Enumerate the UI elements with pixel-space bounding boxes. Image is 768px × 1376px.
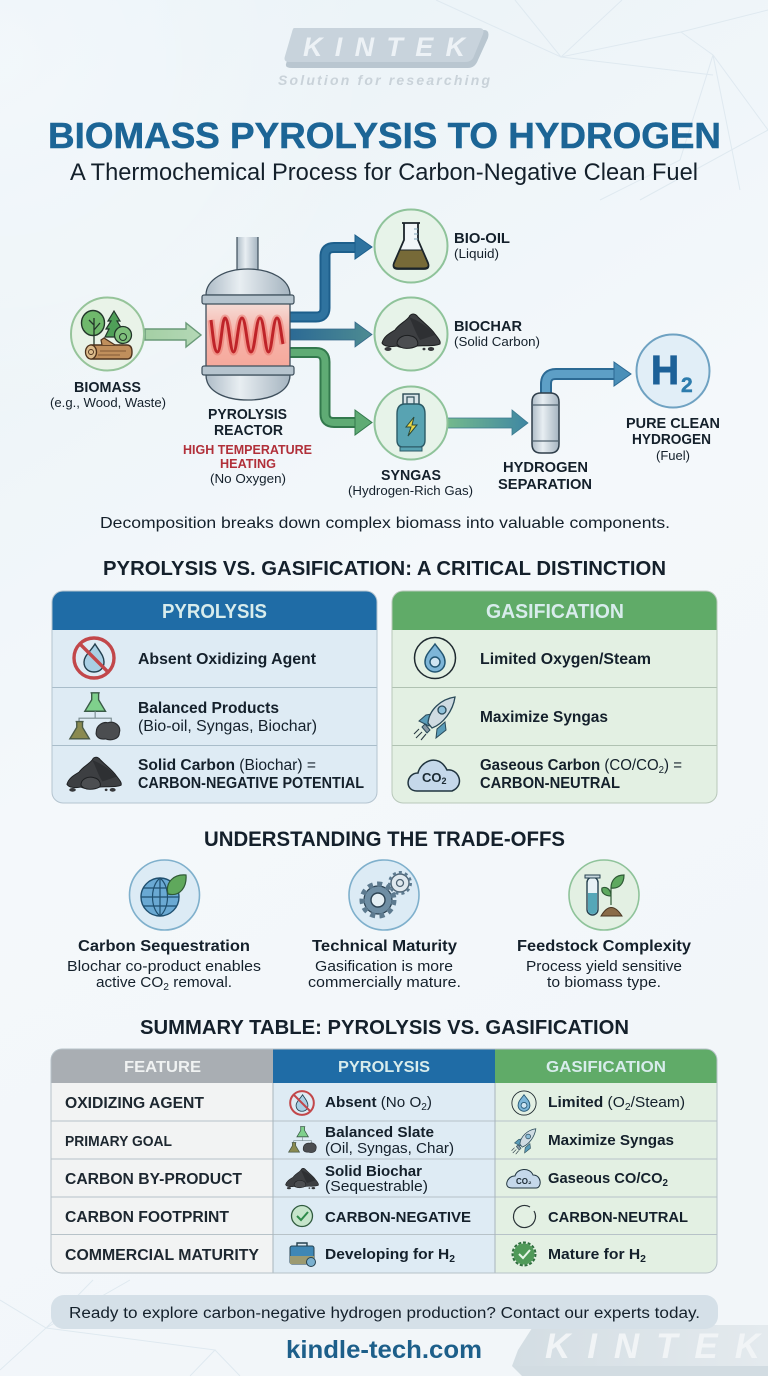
row: primary goal: PRIMARY GOAL <box>65 1133 172 1150</box>
row: primary goal: (Oil, Syngas, Char) <box>325 1140 454 1157</box>
table header: GASIFICATION <box>546 1059 666 1076</box>
icon: limited oxygen <box>414 638 456 678</box>
label: reactor: PYROLYSIS <box>208 406 287 423</box>
text: feedstock complexity <box>517 938 691 991</box>
label: bio-oil <box>454 230 510 261</box>
trade-off: technical maturity <box>308 860 461 991</box>
heading: summary table: SUMMARY TABLE: PYROLYSIS VS. GASIFICATION <box>140 1017 629 1039</box>
icon: no oxidizer <box>74 638 114 678</box>
icon: bio-oil flask <box>374 210 448 282</box>
reactor vessel <box>202 237 294 400</box>
heading: critical distinction: PYROLYSIS VS. GASIFICATION: A CRITICAL DISTINCTION <box>103 558 666 580</box>
row: carbon footprint: CARBON-NEUTRAL <box>548 1209 688 1226</box>
label: biochar: (Solid Carbon) <box>454 334 540 349</box>
label: hydrogen separation: HYDROGEN <box>503 459 588 476</box>
label: biomass <box>50 379 166 410</box>
row: commercial maturity: Developing for H <box>325 1246 445 1263</box>
label: reactor: (No Oxygen) <box>210 471 286 486</box>
row: oxidizing agent: ) <box>427 1094 432 1111</box>
table header <box>124 1059 666 1076</box>
row: absent oxidizing agent: Absent Oxidizing Agent <box>138 651 316 668</box>
summary table <box>51 1049 717 1273</box>
row: solid carbon: CARBON-NEGATIVE POTENTIAL <box>138 775 364 792</box>
row: carbon by-product: CO₂ <box>516 1177 532 1186</box>
row: solid carbon <box>138 757 364 792</box>
row: carbon by-product: 2 <box>663 1178 668 1189</box>
label: syngas <box>348 467 473 498</box>
icon: product tree <box>70 693 120 740</box>
logo: KINTEK header <box>278 28 490 88</box>
table header: PYROLYSIS <box>338 1059 430 1076</box>
row: gaseous carbon: CARBON-NEUTRAL <box>480 775 620 792</box>
text: carbon sequestration: active CO <box>96 974 162 991</box>
icon: globe and leaf <box>130 860 200 930</box>
table header: FEATURE <box>124 1059 201 1076</box>
row: commercial maturity: 2 <box>449 1254 455 1265</box>
row: primary goal: Maximize Syngas <box>548 1132 674 1149</box>
text: technical maturity: Technical Maturity <box>312 938 457 955</box>
heading: trade-offs: UNDERSTANDING THE TRADE-OFFS <box>204 828 565 851</box>
row: commercial maturity: Mature for H <box>548 1246 636 1263</box>
text: carbon sequestration: removal. <box>169 974 232 991</box>
row: carbon footprint: CARBON FOOTPRINT <box>65 1209 230 1226</box>
row: solid carbon: Solid Carbon (Biochar) = <box>138 757 316 774</box>
label: hydrogen separation <box>498 459 592 493</box>
arrow: separation to hydrogen <box>546 362 631 394</box>
label: pure clean hydrogen <box>626 415 720 463</box>
icon: H2: H <box>651 347 679 393</box>
label: reactor: REACTOR <box>214 422 283 439</box>
watermark logo: KINTEK <box>545 1327 763 1366</box>
icon: syngas cylinder <box>374 386 448 460</box>
arrow: biomass to reactor <box>145 323 201 347</box>
row: commercial maturity: 2 <box>640 1254 646 1265</box>
row: carbon by-product: Solid Biochar <box>325 1163 422 1180</box>
icon: gears <box>349 860 419 930</box>
text: technical maturity <box>308 938 461 991</box>
row: commercial maturity: COMMERCIAL MATURITY <box>65 1247 260 1264</box>
watermark logo <box>512 1325 768 1376</box>
trade-off: carbon sequestration <box>67 860 261 993</box>
icon: H2: 2 <box>681 374 693 397</box>
row: gaseous carbon <box>480 757 682 792</box>
text: carbon sequestration: 2 <box>163 982 169 993</box>
header: pyrolysis: PYROLYSIS <box>162 601 267 623</box>
icon: test tube and sprout <box>569 860 639 930</box>
call to action <box>51 1295 718 1329</box>
arrow: syngas to separation <box>447 410 528 435</box>
icon: hydrogen separation unit <box>532 393 559 453</box>
title: BIOMASS PYROLYSIS TO HYDROGEN <box>48 115 721 156</box>
icon: co2 cloud <box>408 760 459 791</box>
arrow: reactor to bio-oil <box>290 235 372 317</box>
text: feedstock complexity: Process yield sensitive <box>526 958 682 975</box>
logo: KINTEK header: Solution for researching <box>278 72 490 88</box>
label: pure clean hydrogen: (Fuel) <box>656 448 690 463</box>
row: carbon by-product: Gaseous CO/CO <box>548 1170 665 1187</box>
icon: biochar <box>67 757 121 792</box>
row: carbon footprint <box>65 1206 688 1228</box>
row: oxidizing agent: Limited (O <box>548 1094 624 1111</box>
label: syngas: (Hydrogen-Rich Gas) <box>348 483 473 498</box>
label: pure clean hydrogen: PURE CLEAN <box>626 415 720 432</box>
text: carbon sequestration: Carbon Sequestration <box>78 938 250 955</box>
icon: rocket <box>414 697 455 740</box>
process flow diagram <box>50 210 720 498</box>
label: reactor: HIGH TEMPERATURE <box>183 442 312 457</box>
row: maximize syngas: Maximize Syngas <box>480 709 608 726</box>
text: technical maturity: commercially mature. <box>308 974 461 991</box>
row: oxidizing agent: 2 <box>421 1102 427 1113</box>
text: carbon sequestration <box>67 938 261 993</box>
label: biochar: BIOCHAR <box>454 318 522 335</box>
icon: biochar pile <box>374 298 448 370</box>
row: primary goal: Balanced Slate <box>325 1124 434 1141</box>
logo: KINTEK header: KINTEK <box>303 32 468 62</box>
row: balanced products: Balanced Products <box>138 700 279 717</box>
label: reactor: HEATING <box>220 456 276 471</box>
row: oxidizing agent: /Steam) <box>631 1094 685 1111</box>
label: syngas: SYNGAS <box>381 467 441 484</box>
row: balanced products <box>138 700 317 735</box>
row: gaseous carbon: Gaseous Carbon (CO/CO <box>480 757 660 774</box>
icon: co2 cloud: CO <box>422 770 442 785</box>
row: carbon by-product: CARBON BY-PRODUCT <box>65 1171 243 1188</box>
icon: biomass <box>71 298 144 370</box>
row: oxidizing agent <box>65 1091 685 1115</box>
subtitle: A Thermochemical Process for Carbon-Negative Clean Fuel <box>70 159 698 186</box>
panel: gasification <box>392 591 717 803</box>
trade-off: feedstock complexity <box>517 860 691 991</box>
website: kindle-tech.com <box>286 1336 482 1364</box>
label: hydrogen separation: SEPARATION <box>498 476 592 493</box>
arrow: reactor to biochar <box>290 322 372 347</box>
row: carbon by-product: (Sequestrable) <box>325 1178 428 1195</box>
label: reactor <box>183 406 312 486</box>
label: biochar <box>454 318 540 349</box>
label: bio-oil: (Liquid) <box>454 246 499 261</box>
row: limited oxygen: Limited Oxygen/Steam <box>480 651 651 668</box>
text: technical maturity: Gasification is more <box>315 958 453 975</box>
header: gasification: GASIFICATION <box>486 601 624 623</box>
label: biomass: BIOMASS <box>74 379 141 396</box>
text: carbon sequestration: Blochar co-product enables <box>67 958 261 975</box>
row: gaseous carbon: 2 <box>659 765 664 776</box>
text: feedstock complexity: Feedstock Complexity <box>517 938 691 955</box>
row: gaseous carbon: ) = <box>664 757 682 774</box>
row: primary goal <box>65 1124 674 1157</box>
icon: H2 <box>636 334 710 408</box>
row: oxidizing agent: 2 <box>625 1102 631 1113</box>
label: pure clean hydrogen: HYDROGEN <box>632 431 711 448</box>
row: oxidizing agent: Absent (No O <box>325 1094 421 1111</box>
caption: Decomposition breaks down complex biomass into valuable components. <box>100 515 670 532</box>
panel: pyrolysis <box>52 591 377 803</box>
row: carbon footprint: CARBON-NEGATIVE <box>325 1209 471 1226</box>
call to action: Ready to explore carbon-negative hydrogen production? Contact our experts today. <box>69 1305 700 1322</box>
row: balanced products: (Bio-oil, Syngas, Biochar) <box>138 718 317 735</box>
icon: co2 cloud: 2 <box>442 776 447 786</box>
arrow: reactor to syngas <box>290 352 372 435</box>
label: bio-oil: BIO-OIL <box>454 230 510 247</box>
row: carbon by-product <box>65 1163 668 1195</box>
label: biomass: (e.g., Wood, Waste) <box>50 395 166 410</box>
row: commercial maturity <box>65 1242 646 1266</box>
row: oxidizing agent: OXIDIZING AGENT <box>65 1095 205 1112</box>
text: feedstock complexity: to biomass type. <box>547 974 661 991</box>
